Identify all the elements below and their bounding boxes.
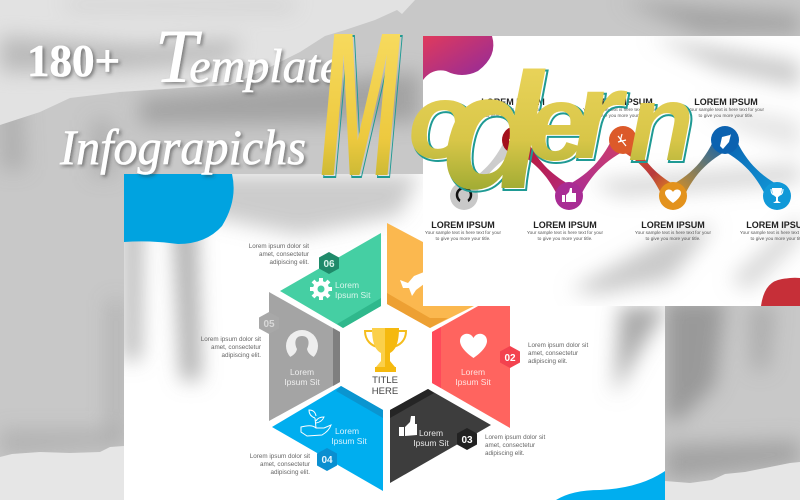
hex segment 02 red [432, 288, 520, 428]
caption 02: Lorem ipsum dolor sit [528, 342, 588, 349]
hex segment 03 dark [390, 389, 491, 483]
label: Ipsum Sit [284, 377, 320, 387]
badge 04: 04 [321, 455, 333, 466]
label: Lorem [461, 367, 485, 377]
timeline heading top 1: Your sample text is here text for your [475, 107, 552, 112]
node: thumbs up [555, 182, 583, 210]
caption 05: adipiscing elit. [221, 352, 261, 359]
badge 03: 03 [461, 435, 473, 446]
torn paper: bottom left [0, 446, 124, 500]
torn paper shading [0, 0, 300, 72]
title: Modern lettering: d [444, 41, 548, 225]
title: Modern lettering: r [575, 48, 630, 187]
badge 06: 06 [323, 259, 335, 270]
timeline heading top 1: LOREM IPSUM [481, 97, 545, 107]
icon: user [286, 330, 318, 364]
torn paper: top left [0, 0, 415, 125]
caption 04: adipiscing elit. [270, 469, 310, 476]
panel: hexagon infographic slide [124, 174, 665, 500]
caption 04: amet, consectetur [260, 461, 310, 468]
timeline heading bottom 2: LOREM IPSUM [533, 220, 597, 230]
label: Ipsum Sit [335, 290, 371, 300]
timeline links [476, 144, 774, 192]
centre title: TITLE [372, 375, 398, 386]
title: Modern lettering: e [527, 62, 587, 183]
timeline heading bottom 2 [527, 220, 604, 241]
caption 05: amet, consectetur [211, 344, 261, 351]
title: Modern lettering: r [573, 46, 628, 185]
node: gear [502, 128, 510, 151]
label: Lorem [335, 426, 359, 436]
timeline heading bottom 3 [635, 220, 712, 241]
hex segment 06 green [280, 233, 381, 328]
timeline heading top 2: LOREM IPSUM [589, 97, 653, 107]
timeline heading bottom 2: to give you more your title. [538, 236, 592, 241]
timeline heading top 2: to give you more your title. [594, 113, 648, 118]
caption 06: adipiscing elit. [269, 259, 309, 266]
caption 06: amet, consectetur [259, 251, 309, 258]
timeline heading bottom 1: to give you more your title. [436, 236, 490, 241]
title: Modern lettering: e [529, 64, 589, 185]
caption 03: amet, consectetur [485, 442, 535, 449]
timeline heading bottom 1 [425, 220, 502, 241]
timeline heading top 3: LOREM IPSUM [694, 97, 758, 107]
node: idea [609, 126, 637, 154]
timeline heading top 2: Your sample text is here text for your [583, 107, 660, 112]
title: Modern lettering [320, 0, 696, 225]
timeline heading bottom 3: LOREM IPSUM [641, 220, 705, 230]
slide leaf shadows [570, 36, 800, 294]
timeline heading bottom 2: Your sample text is here text for your [527, 230, 604, 235]
panel: timeline slide [423, 36, 800, 306]
icon: gear [310, 278, 332, 300]
label: Ipsum Sit [413, 438, 449, 448]
node: user [450, 182, 478, 210]
caption 03: Lorem ipsum dolor sit [485, 434, 545, 441]
torn paper: bottom right [665, 462, 800, 500]
label: Lorem [419, 428, 443, 438]
timeline heading top 3 [688, 97, 765, 118]
hex segment 01 orange [387, 223, 510, 328]
timeline heading bottom 1: LOREM IPSUM [431, 220, 495, 230]
title: 180+ Template Infograpichs: 180+ [27, 36, 120, 86]
icon: rocket [400, 272, 424, 296]
title: Modern lettering: n [628, 62, 694, 183]
timeline heading bottom 3: Your sample text is here text for your [635, 230, 712, 235]
title: 180+ Template Infograpichs: Template [155, 15, 341, 99]
caption 05: Lorem ipsum dolor sit [201, 336, 261, 343]
timeline heading top 3: Your sample text is here text for your [688, 107, 765, 112]
timeline heading top 1: to give you more your title. [486, 113, 540, 118]
blue blob top left [124, 174, 234, 244]
icon: trophy [365, 328, 406, 372]
timeline heading bottom 3: to give you more your title. [646, 236, 700, 241]
label: Lorem [335, 280, 359, 290]
label: Ipsum Sit [331, 436, 367, 446]
timeline heading top 2 [583, 98, 656, 118]
title: Modern lettering: o [408, 60, 474, 181]
caption 02: amet, consectetur [528, 350, 578, 357]
label: Lorem [290, 367, 314, 377]
blue blob bottom right [556, 471, 665, 500]
badge 05: 05 [263, 319, 275, 330]
timeline heading top 1 [482, 98, 544, 117]
title: Modern lettering: n [630, 64, 696, 185]
node: rocket [711, 126, 739, 154]
timeline heading bottom 1: Your sample text is here text for your [425, 230, 502, 235]
title: Modern lettering: o [410, 62, 476, 183]
label: Ipsum Sit [455, 377, 491, 387]
icon: hand with plant [301, 410, 331, 436]
timeline heading bottom 4 [740, 220, 800, 241]
caption 02: adipiscing elit. [528, 358, 568, 365]
slide leaf shadows [124, 174, 665, 395]
badge 02: 02 [504, 353, 516, 364]
caption 06: Lorem ipsum dolor sit [249, 243, 309, 250]
node: heart [659, 182, 687, 210]
magenta blob top left [423, 36, 493, 80]
title: 180+ Template Infograpichs [27, 15, 341, 175]
centre title: HERE [372, 386, 398, 397]
caption 04: Lorem ipsum dolor sit [250, 453, 310, 460]
title: 180+ Template Infograpichs: Infograpichs [59, 119, 306, 175]
icon: heart [460, 334, 487, 358]
caption 03: adipiscing elit. [485, 450, 525, 457]
icon: thumbs up [399, 416, 417, 436]
hex segment 04 blue [272, 386, 383, 491]
title: Modern lettering: d [442, 39, 546, 223]
hex segment 05 grey [259, 292, 340, 421]
timeline heading top 3: to give you more your title. [699, 113, 753, 118]
node: trophy [763, 182, 791, 210]
red blob bottom right [761, 278, 800, 306]
